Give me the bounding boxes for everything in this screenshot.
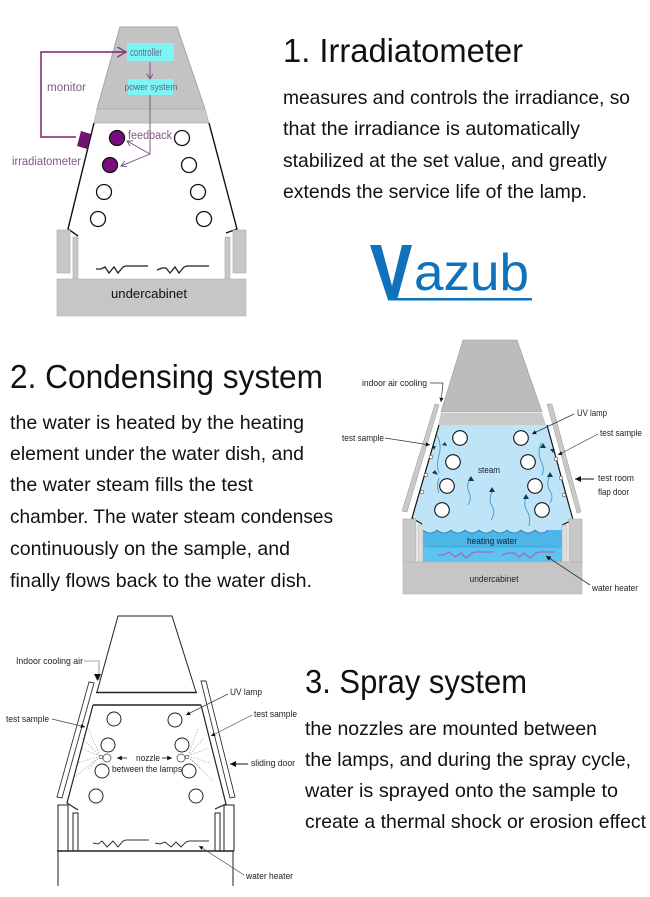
heater — [438, 552, 555, 558]
callout: water heater — [199, 846, 293, 882]
heading: section 3: 3. Spray system — [305, 663, 527, 700]
logo: Vazub: azub — [414, 244, 529, 302]
callout: sliding door — [230, 758, 295, 769]
callout: test sample right: test sample — [600, 428, 642, 439]
text block: section 1: extends the service life of the lamp. — [283, 181, 587, 203]
lamp housing — [93, 616, 201, 705]
label: between the lamps: between the lamps — [112, 764, 182, 775]
text block: section 3: the nozzles are mounted between — [305, 718, 597, 740]
water: heating water — [467, 536, 517, 547]
undercabinet — [403, 562, 582, 594]
text block: section 2: finally flows back to the water dish. — [10, 570, 312, 592]
callout: indoor cooling air — [16, 656, 101, 681]
heading: section 1: 1. Irradiatometer — [283, 32, 523, 69]
side panels — [57, 230, 246, 279]
label: nozzle — [117, 753, 172, 764]
callout: test sample right: test sample — [254, 709, 297, 720]
callout: indoor air cooling — [362, 378, 443, 402]
text block: section 2: element under the water dish, and — [10, 443, 304, 465]
lamps — [90, 130, 212, 226]
power system box — [124, 79, 178, 95]
heading: section 2: 2. Condensing system — [10, 358, 323, 395]
text block: section 1: stabilized at the set value, and greatly — [283, 150, 607, 172]
diagram: condensing chamber — [342, 340, 642, 594]
feedback arrows — [121, 62, 150, 166]
steam area — [412, 425, 572, 530]
text block: section 2: the water is heated by the heating — [10, 412, 304, 434]
callout: UV lamp — [532, 408, 607, 434]
diagram: irradiatometer chamber — [12, 27, 246, 316]
text block: section 1 — [283, 87, 630, 203]
steam arrowheads — [432, 442, 555, 499]
power system box: power system — [124, 82, 178, 93]
callout: sliding door: sliding door — [251, 758, 295, 769]
side panels — [403, 519, 582, 562]
callout: water heater — [546, 556, 638, 594]
text block: section 2: chamber. The water steam condenses — [10, 506, 333, 528]
callout: test room flap door — [575, 473, 634, 498]
text block: section 3 — [304, 718, 647, 833]
text block: section 1: measures and controls the irradiance, so — [283, 87, 630, 109]
label: monitor: monitor — [47, 82, 86, 94]
diagram: spray chamber — [6, 616, 297, 886]
lamps — [89, 712, 203, 803]
chamber walls — [68, 123, 237, 236]
test samples and door — [402, 404, 581, 513]
nozzles — [99, 754, 189, 762]
callout: test sample left: test sample — [6, 714, 49, 725]
callout: test sample left — [6, 714, 85, 727]
logo: Vazub — [370, 244, 532, 302]
callout: water heater: water heater — [245, 871, 293, 882]
lamp housing — [94, 27, 209, 123]
text block: section 1: that the irradiance is automatically — [283, 118, 580, 140]
label: feedback: feedback — [128, 130, 172, 142]
chamber walls — [412, 425, 573, 525]
callout: UV lamp: UV lamp — [230, 687, 262, 698]
base frames — [57, 805, 234, 886]
callout: indoor air cooling: indoor air cooling — [362, 378, 427, 389]
callout: UV lamp — [186, 687, 262, 715]
label: irradiatometer: irradiatometer — [12, 156, 81, 168]
heater — [96, 266, 209, 273]
callout: test sample right — [211, 709, 297, 736]
label: steam: steam — [478, 465, 500, 475]
undercabinet: undercabinet — [111, 287, 188, 301]
text block: section 2: the water steam fills the test — [10, 474, 254, 496]
lamp housing — [438, 340, 546, 425]
chamber walls — [67, 705, 226, 810]
controller box: controller — [130, 47, 162, 59]
callout: test sample left: test sample — [342, 433, 384, 444]
lamps — [435, 431, 549, 517]
label: nozzle: nozzle — [136, 753, 160, 764]
water — [423, 530, 562, 562]
text block: section 3: create a thermal shock or erosion effect — [305, 811, 647, 833]
text block: section 2 — [10, 412, 333, 592]
callout: test sample right — [558, 428, 642, 455]
monitor loop arrow — [41, 52, 126, 137]
controller box — [127, 43, 174, 61]
callout: indoor cooling air: Indoor cooling air — [16, 656, 83, 667]
irradiatometer sensor — [77, 131, 91, 149]
heater — [93, 840, 209, 847]
callout: test room flap door: flap door — [598, 487, 629, 498]
callout: UV lamp: UV lamp — [577, 408, 607, 419]
test samples and door — [57, 681, 235, 798]
callout: test sample left — [342, 433, 430, 445]
undercabinet: undercabinet — [470, 574, 519, 585]
text block: section 2: continuously on the sample, and — [10, 538, 290, 560]
spray — [75, 728, 213, 781]
callout: water heater: water heater — [591, 583, 638, 594]
undercabinet — [57, 279, 246, 316]
text block: section 3: the lamps, and during the spray cycle, — [305, 749, 631, 771]
steam wisps — [437, 435, 552, 526]
condensation drops — [420, 455, 566, 497]
text block: section 3: water is sprayed onto the sample to — [304, 780, 618, 802]
callout: test room flap door: test room — [598, 473, 634, 484]
